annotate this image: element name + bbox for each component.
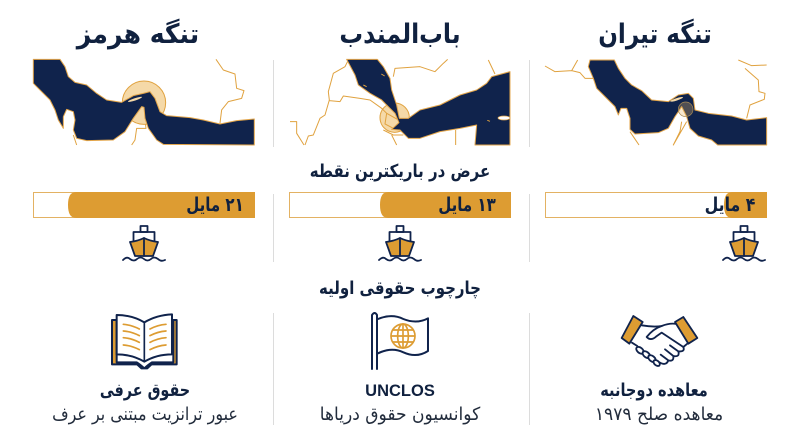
- label: UNCLOS: [320, 382, 481, 425]
- bar: 21 miles: [34, 192, 255, 218]
- bar: 4 miles: [546, 192, 767, 218]
- icon: book: [112, 314, 177, 368]
- icon: ship left: [123, 226, 165, 261]
- label: UNCLOS: UNCLOS: [365, 382, 435, 400]
- bar: 4 miles: ۴ مایل: [705, 195, 755, 216]
- heading: width at narrowest point: عرض در باریکترین نقطه: [310, 161, 490, 182]
- bar: 13 miles: [290, 192, 511, 218]
- label: customary law: [52, 379, 238, 425]
- map: Strait of Tiran: [545, 60, 767, 145]
- title: Bab el-Mandeb: باب‌المندب: [339, 17, 461, 49]
- label: customary law: عبور ترانزیت مبتنی بر عرف: [52, 404, 238, 425]
- heading: primary legal framework: چارچوب حقوقی اولیه: [319, 278, 481, 299]
- label: bilateral treaty: معاهده دوجانبه: [600, 380, 708, 401]
- icon: handshake: [622, 316, 697, 367]
- map: Bab el-Mandeb: [290, 59, 510, 145]
- label: bilateral treaty: معاهده صلح ۱۹۷۹: [595, 405, 723, 425]
- icon: ship right: [723, 226, 765, 261]
- title: Hormuz: تنگه هرمز: [75, 18, 199, 50]
- icon: flag with globe: [372, 313, 428, 369]
- label: UNCLOS: کوانسیون حقوق دریاها: [320, 405, 481, 425]
- bar: 13 miles: ۱۳ مایل: [438, 194, 496, 217]
- icon: ship middle: [379, 226, 421, 261]
- label: customary law: حقوق عرفی: [100, 379, 190, 400]
- map: Strait of Hormuz: [33, 59, 254, 145]
- bar: 21 miles: ۲۱ مایل: [186, 194, 244, 217]
- label: bilateral treaty: [595, 380, 723, 425]
- title: Tiran: تنگه تیران: [598, 18, 712, 51]
